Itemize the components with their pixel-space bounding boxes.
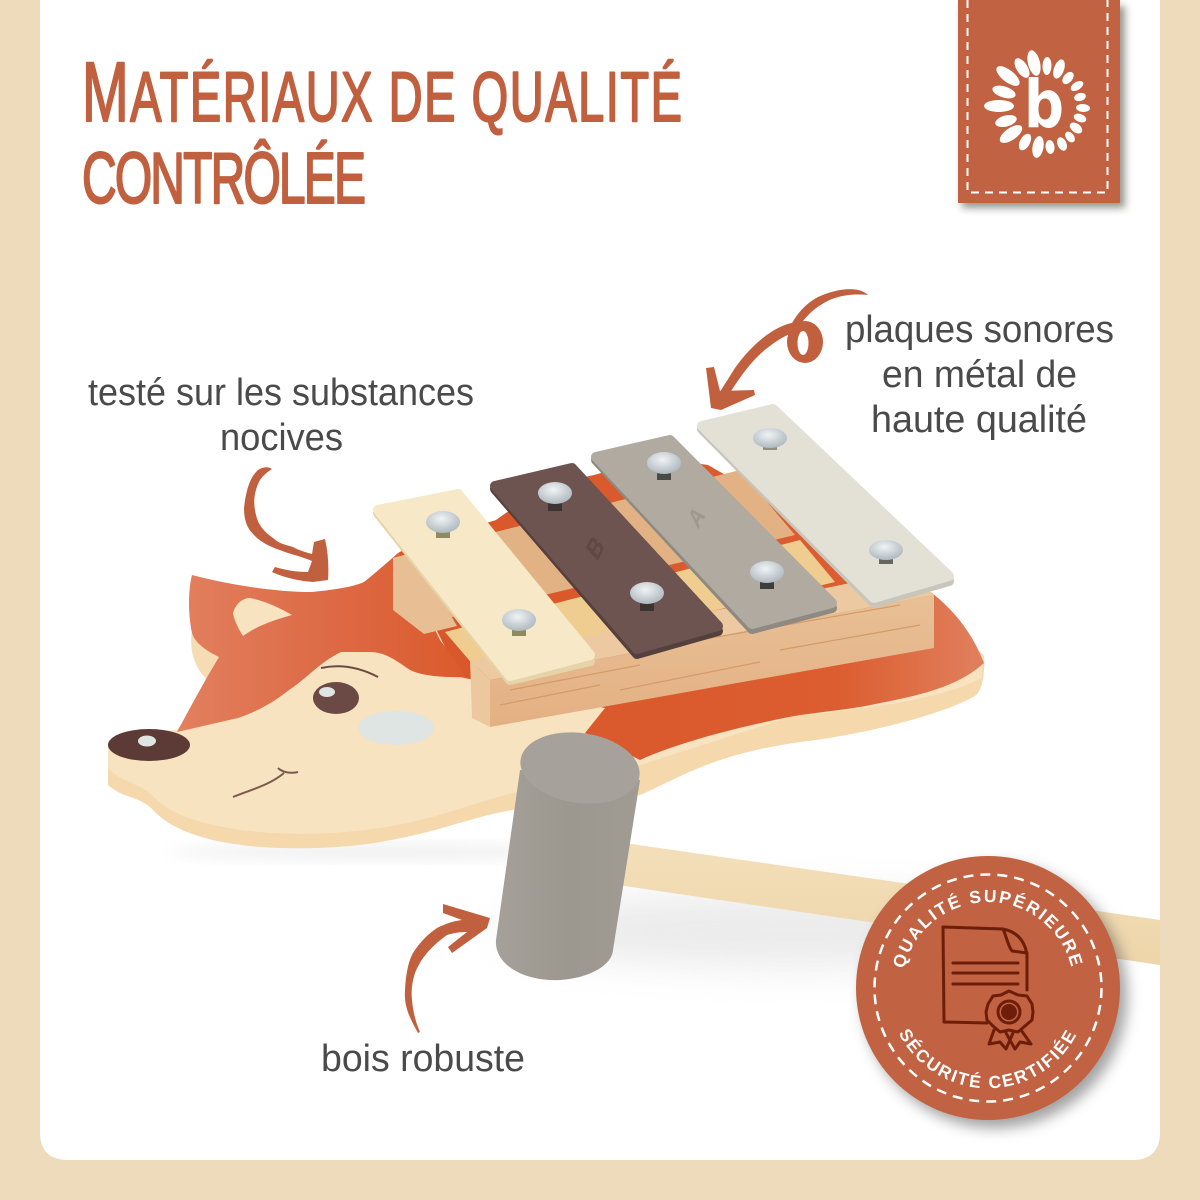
- hammer head: [496, 725, 644, 980]
- label: harmful substances: testé sur les substances: [88, 372, 474, 414]
- fox smile: [233, 768, 298, 797]
- plate 1: [378, 494, 590, 680]
- label: sturdy wood: bois robuste: [321, 1038, 525, 1080]
- fox nose: [108, 729, 190, 761]
- label: metal plates: [845, 309, 1114, 441]
- fox brow: [321, 666, 378, 677]
- fox ear: [233, 598, 292, 636]
- plate 2: B: [583, 531, 609, 567]
- arrow: to fox: [244, 467, 328, 582]
- back wood block: [393, 470, 795, 634]
- badge text bottom: SÉCURITÉ CERTIFIÉE: [900, 1029, 1076, 1088]
- label: metal plates: haute qualité: [871, 399, 1087, 441]
- fox cheek: [358, 711, 434, 745]
- plate 2: [495, 468, 718, 654]
- label: harmful substances: [88, 372, 474, 459]
- plate 3: [596, 440, 832, 629]
- hammer handle: [618, 843, 1160, 965]
- quality badge: [854, 855, 1136, 1137]
- title: MATÉRIAUX DE QUALITÉ: [82, 46, 682, 140]
- fox eye: [313, 682, 359, 714]
- fox base edge: [108, 600, 984, 848]
- badge text top: QUALITÉ SUPÉRIEURE: [894, 890, 1083, 967]
- hammer: [496, 725, 1160, 980]
- label: metal plates: plaques sonores: [845, 309, 1114, 351]
- toy shadows: [170, 844, 1100, 968]
- arrow: to plates: [706, 289, 868, 410]
- label: metal plates: en métal de: [882, 354, 1077, 396]
- title: [82, 46, 682, 218]
- yellow strip: [445, 540, 835, 667]
- plate 3: A: [684, 500, 709, 534]
- brand tag with logo: [958, 0, 1125, 208]
- icon: sunflower logo: b: [1024, 66, 1064, 143]
- plate 4: [702, 409, 949, 603]
- rivets: [426, 428, 903, 636]
- icon: sunflower logo: [984, 49, 1090, 159]
- orange strips: [575, 582, 612, 600]
- label: harmful substances: nocives: [220, 417, 343, 459]
- fox body: [398, 462, 984, 760]
- arrow: to hammer: [405, 904, 490, 1033]
- fox face mask: [177, 553, 467, 732]
- front wood block: [470, 572, 934, 727]
- fox base top: [108, 600, 984, 834]
- icon: certificate: [943, 927, 1033, 1049]
- title: CONTRÔLÉE: [82, 138, 366, 218]
- fox xylophone toy: [108, 409, 984, 848]
- fox ear side sliver: [191, 630, 225, 682]
